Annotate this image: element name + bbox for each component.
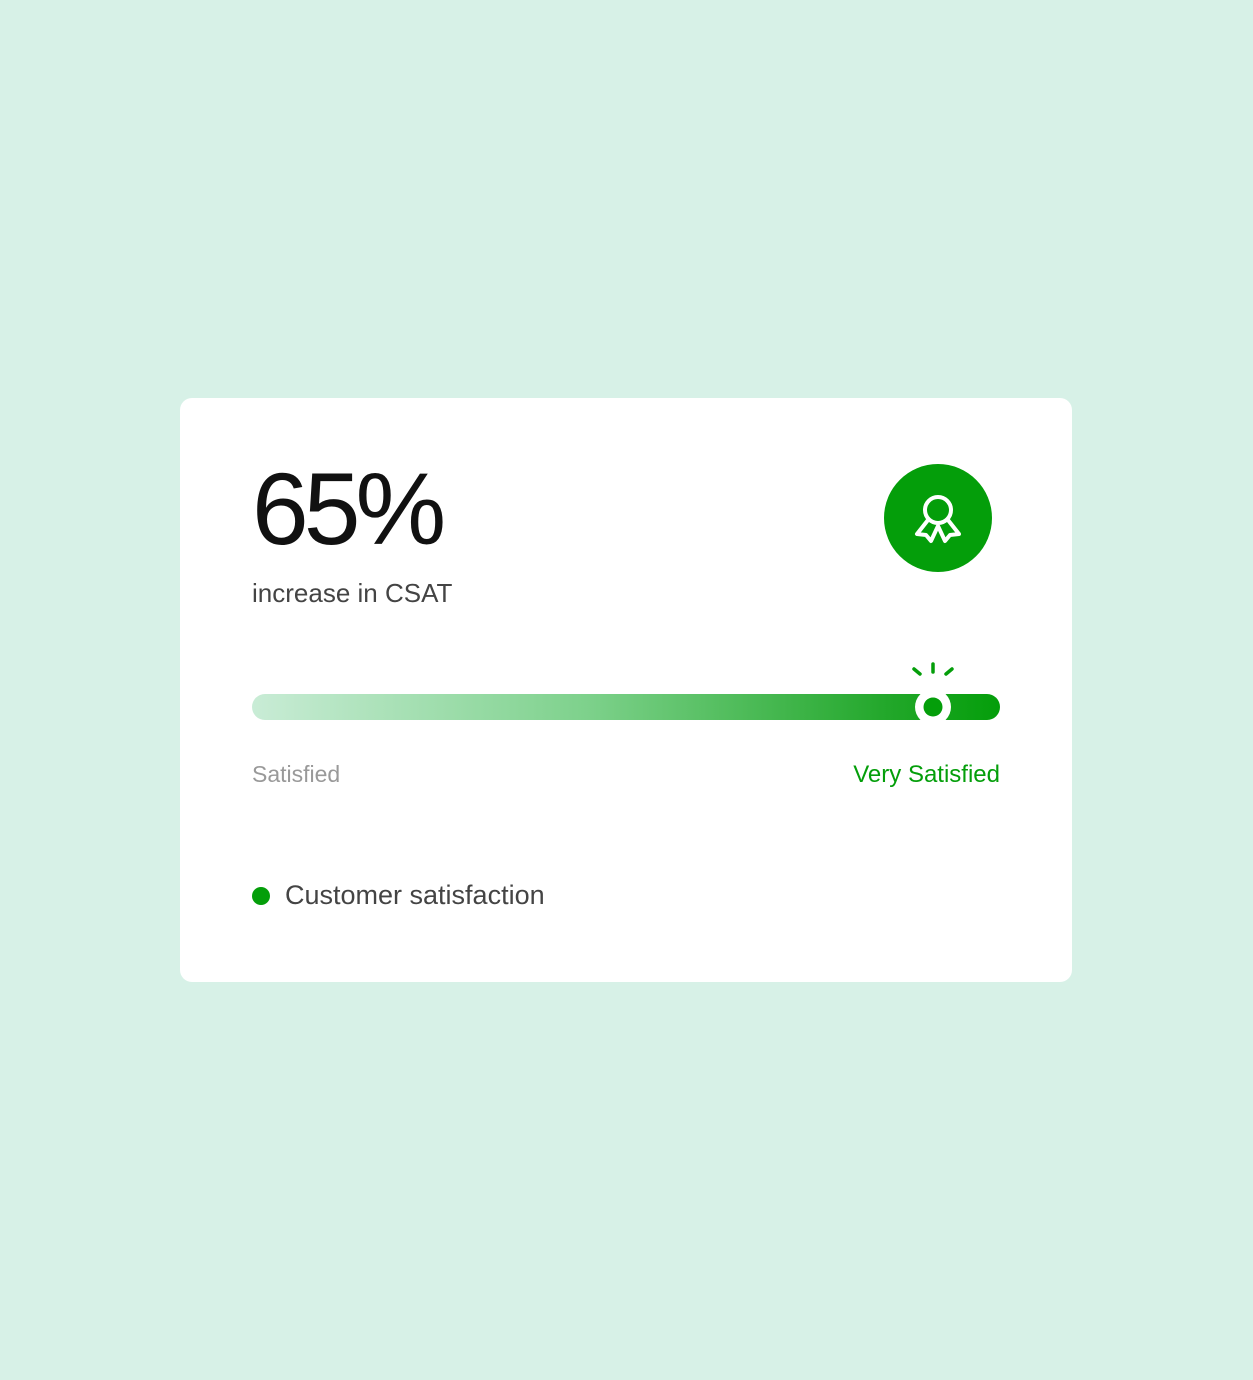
progress bar: [252, 694, 1000, 720]
big number: 65%: [252, 452, 441, 566]
label: satisfied: Satisfied: [252, 761, 340, 787]
subtitle: increase in CSAT: [252, 578, 452, 608]
icon: award badge: [884, 464, 992, 572]
legend: Customer satisfaction: [285, 880, 545, 910]
label: very satisfied: Very Satisfied: [853, 761, 1000, 788]
icon: knob with sparkle: [912, 662, 954, 720]
panel: CSAT card: [180, 398, 1072, 982]
